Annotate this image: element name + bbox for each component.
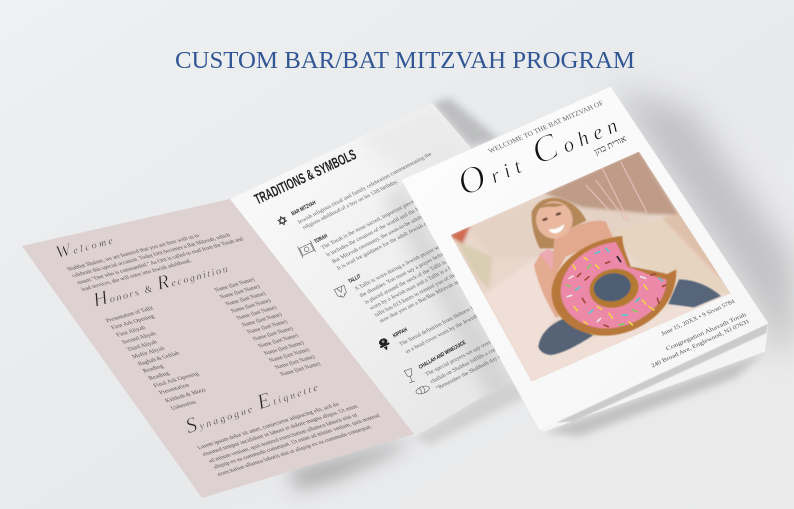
list: names: Name (last Name) <box>224 290 267 307</box>
jeans <box>538 279 721 355</box>
shadows on the table <box>290 87 794 490</box>
list: names: Name (last Name) <box>251 325 295 342</box>
list: honors: Presentation of Tallit <box>104 305 155 324</box>
text: etiquette paragraph: exercitation ullamco laboris nisi ut aliquip ex ea commodo consequat. <box>216 424 374 478</box>
girl <box>531 196 613 317</box>
heading: name: Orit Cohen <box>451 101 622 205</box>
text: tallit: is placed around the neck of the Tallit is folded and <box>363 247 471 306</box>
text: etiquette paragraph: ad minim veniam, quis nostrud exercitation ullamco laboris nisi ut <box>207 413 359 464</box>
text: challah and wine: CHALLAH AND WINE/JUICE <box>418 340 467 371</box>
text: torah <box>314 183 459 272</box>
heading: traditions and symbols: TRADITIONS & SYMBOLS <box>252 147 359 208</box>
panel: folded cover card <box>402 87 768 432</box>
streamers <box>586 162 647 222</box>
list: names: Name (last Name) <box>229 297 273 314</box>
list: names: Name (last Name) <box>279 361 322 378</box>
list: honors: First Ark Opening <box>110 314 156 331</box>
list: honors: Final Ark Opening <box>153 371 201 389</box>
back sheet of the cover <box>539 323 768 432</box>
text: tallit: TALLIT <box>348 274 362 285</box>
photo: girl with donut balloon <box>450 152 730 382</box>
text: bar mitzvah: Jewish religious ritual and family celebration commemorating the <box>296 151 434 226</box>
list: honors: Third Aliyah <box>126 340 159 353</box>
text: etiquette paragraph: Lorem ipsum dolor sit amet, consectetur adipiscing elit, sed do <box>196 402 341 451</box>
text: kippah: as a head cover worn by the Jewish men and boys. <box>404 298 510 355</box>
list: honors: Kiddush & Motzi <box>164 388 208 404</box>
panel: inside left page (pink) <box>22 199 414 498</box>
list: names: Name (last Name) <box>273 354 317 371</box>
text: etiquette paragraph <box>196 402 382 478</box>
text: welcome paragraph: lead services, she will enter into Jewish adulthood. <box>80 258 194 293</box>
text: tallit: now that you are a Bar/Bas Mitzvah and must follow <box>378 264 490 324</box>
list: names: Name (last Name) <box>268 347 311 364</box>
list: honors: Presentation <box>158 383 191 396</box>
list: honors: Second Aliyah <box>121 331 158 346</box>
text: hebrew name: אורית כהן <box>593 133 628 157</box>
text: torah: Bar Mitzvah ceremony, the soon-to-be adult will read from it. <box>330 196 459 265</box>
text: welcome paragraph: Shabbat Shalom, we are honored that you are here with us to <box>66 233 201 273</box>
traditions and symbols text <box>252 147 533 396</box>
sprinkles <box>566 248 666 327</box>
icon: wine glass <box>404 368 416 383</box>
text: torah: It includes the creation of the world and the history of it. <box>325 194 443 258</box>
list: honors <box>104 305 208 412</box>
text: congregation: Congregation Ahavath Torah <box>665 312 748 352</box>
icon: kippah <box>377 337 392 352</box>
text: tallit: tallit has 613 knots to remind you of the commandments <box>373 254 492 318</box>
text: torah: It is read for guidance for the adult Jewish community. <box>335 210 450 272</box>
cover sheet <box>402 87 768 430</box>
text: address: 240 Broad Ave, Englewood, NJ 07631 <box>650 319 751 369</box>
list: names: Name (last Name) <box>213 276 256 293</box>
list: names: Name (last Name) <box>262 340 306 357</box>
list: names: Name (last Name) <box>218 283 262 300</box>
heading: welcome: Welcome <box>53 228 115 262</box>
heading: honors and recognition: Honors & Recognition <box>90 255 229 312</box>
list: names: Name (last Name) <box>235 304 278 321</box>
text: date: June 15, 20XX • 9 Sivan 5784 <box>660 299 736 337</box>
list: honors: Reading <box>142 364 165 374</box>
list: honors: Maftir Aliyah <box>131 345 166 360</box>
text: challah and wine: The special prayers we say over the bread and wine <box>424 320 532 378</box>
panel: inside right page <box>230 103 510 436</box>
text: welcome paragraph: celebrate this special occasion. Today Orit becomes a Bat Mitzvah, which <box>71 233 232 279</box>
heading: synagogue etiquette: Synagogue Etiquette <box>182 372 320 438</box>
text: welcome line: WELCOME TO THE BAT MITZVAH OF <box>487 99 605 155</box>
list: names: Name (last Name) <box>240 311 284 328</box>
text: tallit: the shoulder. You must say a prayer before wearing it. It <box>358 236 476 299</box>
donut balloon <box>552 236 676 336</box>
text: torah: TORAH <box>314 233 329 245</box>
list: names <box>213 276 322 378</box>
list: honors: Usherettes <box>170 400 199 412</box>
list: honors: Hagbah & Gelilah <box>137 351 181 367</box>
photo background <box>450 152 730 382</box>
icon: torah scroll <box>298 241 316 258</box>
text: etiquette paragraph: aliquip ex ea commodo consequat. Ut enim ad minim veniam, quis nostrud <box>212 413 382 470</box>
icon: star of david <box>277 215 287 226</box>
title: CUSTOM BAR/BAT MITZVAH PROGRAM <box>175 48 635 74</box>
text: challah and wine: challah on Shabbat fulfills a commandment to <box>429 332 526 385</box>
list: honors: First Aliyah <box>115 325 147 338</box>
icon: tallit <box>334 285 348 299</box>
list: honors: Reading <box>148 371 171 382</box>
text: bar mitzvah: BAR MITZVAH <box>291 200 317 217</box>
text: challah and wine: “Remember the Shabbath day to keep it holy.” <box>434 338 533 392</box>
list: names: Name (last Name) <box>257 332 300 349</box>
text: tallit <box>348 227 492 324</box>
list: names: Name (last Name) <box>246 318 289 335</box>
text: kippah: KIPPAH <box>392 327 409 339</box>
text: bar mitzvah: religious adulthood of a boy on his 13th birthday. <box>301 178 400 231</box>
text: torah: The Torah is the most sacred, important piece of Jewish life. <box>320 183 446 251</box>
text: tallit: A Tallit is worn during a Jewish prayer service and rests on <box>354 227 477 292</box>
text: etiquette paragraph: eiusmod tempor incididunt ut labore et dolore magna aliqua. Ut enim <box>201 404 360 458</box>
icon: challah bread <box>415 384 430 396</box>
text: welcome paragraph: means “One who is commanded.” As Orit is called to read from the Torah and <box>75 236 245 286</box>
text: tallit: worn by a Jewish man and a Tallit is a four-cornered <box>368 252 478 312</box>
text: kippah: The literal definition from Hebrew is dome, and it is worn <box>398 282 519 348</box>
